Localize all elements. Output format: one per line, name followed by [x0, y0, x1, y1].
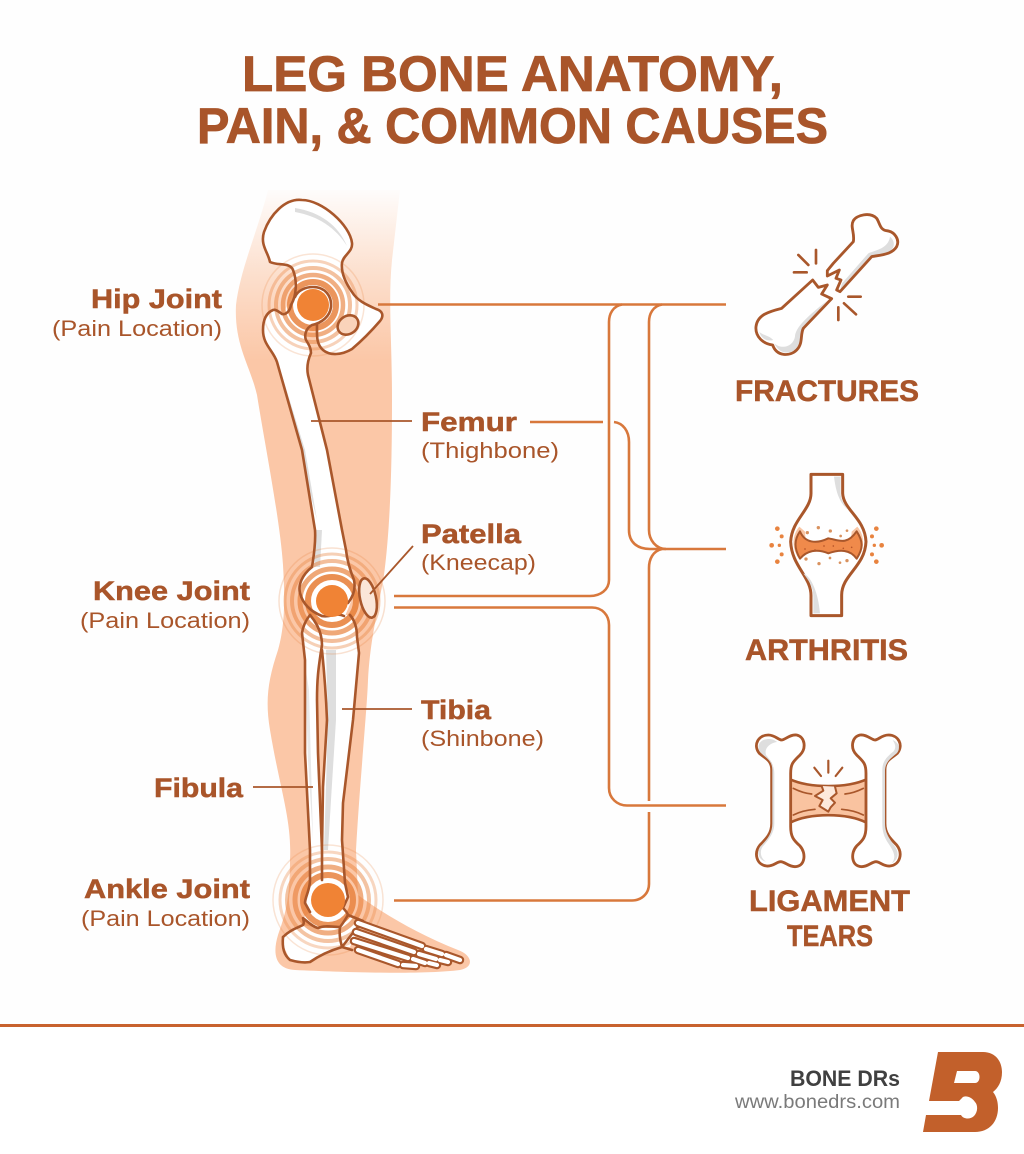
label: ankle joint: (Pain Location): [81, 906, 250, 931]
label: femur: (Thighbone): [421, 438, 559, 463]
heading: ligament tears: [749, 885, 910, 953]
label: tibia: Tibia: [421, 695, 492, 725]
label: knee joint: Knee Joint: [93, 576, 250, 606]
label: hip joint: Hip Joint: [91, 284, 222, 314]
label: hip joint: [52, 284, 222, 341]
heading: fractures: FRACTURES: [735, 375, 919, 408]
label: knee joint: (Pain Location): [80, 608, 250, 633]
logo: bone B: [923, 1052, 1002, 1132]
icon: torn ligament: [756, 735, 900, 867]
label: tibia: (Shinbone): [421, 726, 544, 751]
foot bones: [354, 923, 460, 966]
heading: arthritis: ARTHRITIS: [745, 634, 908, 667]
label: femur: Femur: [421, 407, 518, 437]
icon: arthritic joint: [769, 474, 884, 616]
label: fibula: Fibula: [154, 773, 244, 803]
fibula peach gap: [317, 648, 327, 850]
label: knee joint: [80, 576, 250, 633]
label: patella: Patella: [421, 519, 522, 549]
leg silhouette: [236, 190, 470, 973]
pain rings: knee: [279, 548, 385, 654]
footer brand text: [734, 1066, 900, 1113]
pain rings: ankle: [273, 845, 383, 955]
pain centres: [297, 289, 329, 321]
bone fills: [263, 200, 382, 962]
leg anatomy illustration: [236, 190, 470, 973]
leader lines: [253, 421, 413, 787]
label: patella: (Kneecap): [421, 550, 536, 575]
label: ankle joint: [81, 874, 250, 931]
label: femur: [421, 407, 559, 463]
footer brand text: www.bonedrs.com: [734, 1092, 900, 1113]
label: patella: [421, 519, 536, 575]
footer brand text: BONE DRs: [790, 1066, 900, 1091]
bone outlines: [263, 200, 382, 962]
title: [197, 46, 828, 154]
title: LEG BONE ANATOMY,: [242, 46, 783, 102]
pain rings: hip: [262, 254, 364, 356]
connector lines: [378, 304, 726, 900]
icon: fractured bone: [756, 215, 898, 354]
bone shading: [281, 208, 347, 850]
heading: ligament tears: LIGAMENT: [749, 885, 910, 918]
label: tibia: [421, 695, 544, 751]
heading: ligament tears: TEARS: [787, 920, 873, 953]
label: ankle joint: Ankle Joint: [84, 874, 250, 904]
label: hip joint: (Pain Location): [52, 316, 222, 341]
title: PAIN, & COMMON CAUSES: [197, 98, 828, 154]
footer divider: [0, 1024, 1024, 1027]
